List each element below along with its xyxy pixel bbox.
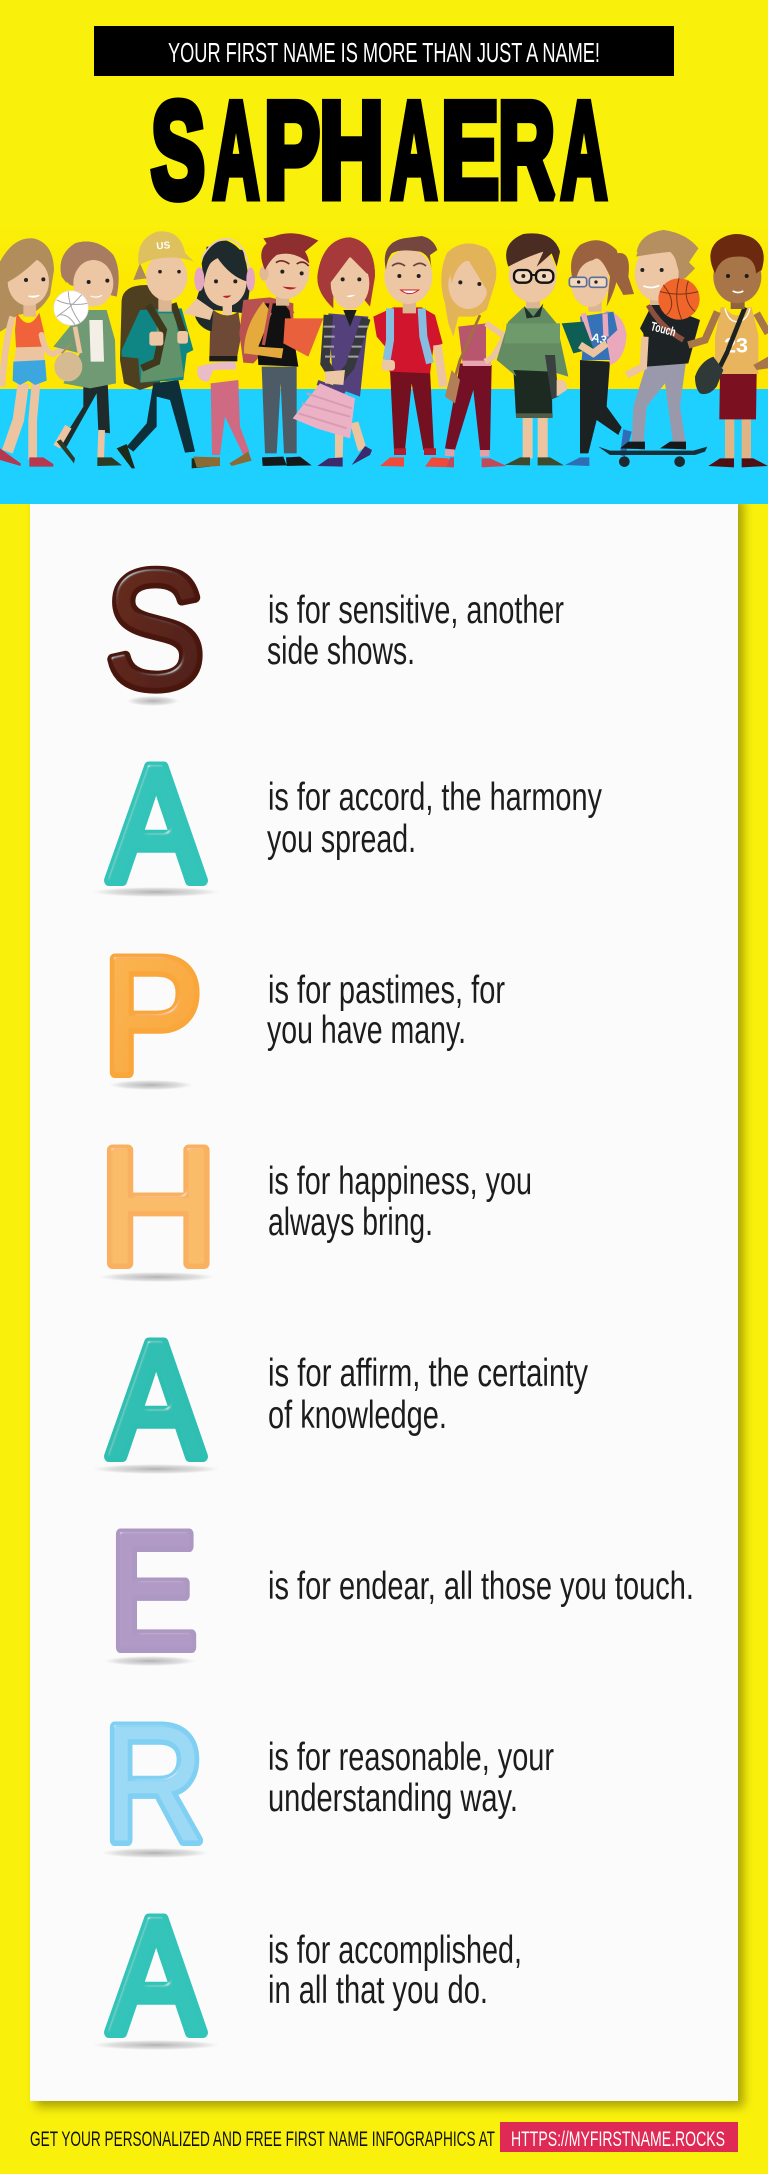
title: R xyxy=(498,74,555,226)
text: S line xyxy=(267,589,564,673)
letter A (second): A xyxy=(108,1308,204,1492)
student: boy with red backpack and book xyxy=(239,233,323,466)
text: H line: is for happiness, you xyxy=(268,1160,532,1203)
text: R line: is for reasonable, your xyxy=(268,1736,554,1779)
student: girl with ponytail and tablet: A3 xyxy=(590,330,609,348)
text: H line xyxy=(268,1160,532,1244)
footer link badge xyxy=(500,2122,738,2152)
text: A xyxy=(561,74,607,226)
panel shadow xyxy=(36,500,744,2107)
student: girl with volleyball xyxy=(53,242,122,466)
footer text: GET YOUR PERSONALIZED AND FREE FIRST NAME INFOGRAPHICS AT xyxy=(30,2128,495,2151)
text: A line three: is for accomplished, xyxy=(268,1929,522,1972)
text: H line: always bring. xyxy=(268,1201,433,1244)
letter H: H xyxy=(99,1114,218,1298)
student: girl with headphones xyxy=(183,239,255,467)
title: A xyxy=(391,74,437,226)
text: A line two: is for affirm, the certainty xyxy=(268,1352,588,1395)
letter A (first): A xyxy=(108,732,204,916)
student: skateboarder with basketball: Touch xyxy=(649,319,677,339)
text: P line: is for pastimes, for xyxy=(268,969,505,1012)
header banner xyxy=(94,26,674,76)
title: S xyxy=(151,74,205,226)
title: A xyxy=(213,74,259,226)
student: boy with glasses and laptop xyxy=(497,233,568,465)
text: R line: understanding way. xyxy=(268,1777,518,1820)
text: A line: you spread. xyxy=(267,818,416,861)
student: boy with red shirt and blue straps xyxy=(373,236,453,467)
letter S: S xyxy=(106,538,204,722)
text: P line: you have many. xyxy=(267,1009,466,1052)
text: P line xyxy=(267,969,505,1052)
student: girl with ponytail and tablet xyxy=(562,240,634,466)
letter R: R xyxy=(103,1692,205,1876)
title: E xyxy=(441,74,499,226)
group of students right xyxy=(373,230,768,467)
group of students left xyxy=(0,231,375,468)
text: A line three: in all that you do. xyxy=(268,1969,488,2012)
letter P: P xyxy=(102,924,202,1108)
student: girl with pink bag xyxy=(293,237,375,467)
title xyxy=(151,74,607,226)
title: H xyxy=(319,74,384,226)
white panel xyxy=(30,504,738,2101)
text: A line xyxy=(267,776,602,861)
text: R line xyxy=(268,1736,554,1820)
title: P xyxy=(264,74,320,226)
student: blonde girl with strap bag xyxy=(441,244,507,467)
text: A line two: of knowledge. xyxy=(268,1394,447,1437)
text: S line: is for sensitive, another xyxy=(268,589,564,632)
letter A (third): A xyxy=(108,1884,204,2068)
student: girl in orange top xyxy=(0,238,78,467)
text: A line three xyxy=(268,1929,522,2012)
student: boy with jersey and black bag xyxy=(688,234,768,467)
student: skateboarder with basketball xyxy=(598,230,707,467)
student: boy with backpack and cap xyxy=(117,231,210,468)
text: S line: side shows. xyxy=(267,630,415,673)
blue floor band xyxy=(0,389,768,504)
student: boy with jersey and black bag: 23 xyxy=(724,334,748,358)
text: A line: is for accord, the harmony xyxy=(268,776,602,819)
text: A line two xyxy=(268,1352,588,1437)
student: boy with backpack and cap: US xyxy=(156,240,171,252)
letter E: E xyxy=(110,1498,198,1682)
